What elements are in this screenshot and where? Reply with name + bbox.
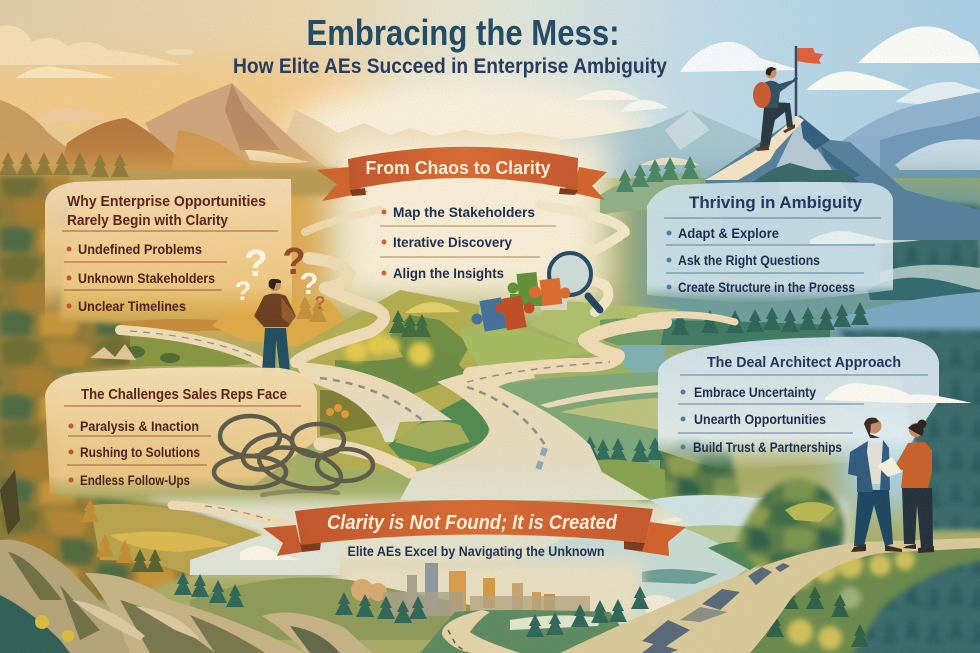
far mountains right <box>560 92 980 220</box>
list: thriving items: Adapt & Explore <box>678 226 779 241</box>
panel: thriving in ambiguity <box>647 182 920 303</box>
left autumn forest <box>0 176 345 600</box>
right evergreen forest <box>600 156 980 530</box>
icon: tangled scribble <box>214 416 373 496</box>
list: why enterprise items: Undefined Problems <box>78 242 202 257</box>
title <box>233 12 667 78</box>
list: challenges items: Endless Follow-Ups <box>80 473 190 488</box>
summit mountain <box>705 115 980 240</box>
road dashes <box>130 331 610 520</box>
winding roads <box>120 205 770 526</box>
clouds in the sky <box>0 25 980 112</box>
list: why enterprise items <box>66 242 215 314</box>
icon: climber with flag on summit <box>753 46 823 151</box>
ribbon: from chaos to clarity: From Chaos to Clarity <box>366 157 551 178</box>
list: deal architect items: Build Trust & Partnerships <box>693 440 842 455</box>
panel: challenges sales reps face <box>45 367 317 495</box>
icon: confused person with question marks <box>235 241 326 372</box>
list: thriving items: Ask the Right Questions <box>678 253 820 268</box>
heading: deal architect: The Deal Architect Approach <box>707 354 901 371</box>
list: deal architect items: Unearth Opportunities <box>694 412 826 427</box>
icon: confused person with question marks: ? <box>244 243 268 285</box>
icon: confused person with question marks: ? <box>314 293 326 313</box>
title: How Elite AEs Succeed in Enterprise Ambiguity <box>233 55 667 78</box>
bottom tree line <box>174 572 649 637</box>
heading: challenges: The Challenges Sales Reps Face <box>81 386 287 403</box>
panel: deal architect approach <box>658 337 972 470</box>
icon: puzzle pieces and magnifier <box>472 253 600 332</box>
subtitle: elite aes: Elite AEs Excel by Navigating the Unknown <box>348 543 604 559</box>
ribbon: clarity is not found: Clarity is Not Found; It is Created <box>327 512 618 534</box>
list: why enterprise items: Unclear Timelines <box>78 299 186 314</box>
icon: confused person with question marks: ? <box>282 241 306 283</box>
icon: confused person with question marks: ? <box>300 266 318 301</box>
list: from chaos to clarity items <box>380 204 556 281</box>
lower valley water and bank <box>190 495 785 653</box>
bottom-left rocky hills <box>0 540 372 653</box>
ribbon: from chaos to clarity <box>317 147 607 201</box>
central valley hills <box>300 290 680 500</box>
list: challenges items <box>68 419 200 488</box>
cloud across panel <box>825 383 972 403</box>
list: challenges items: Paralysis & Inaction <box>80 419 199 434</box>
panel: why enterprise opportunities <box>45 179 292 320</box>
icon: two colleagues with document <box>848 418 934 553</box>
list: thriving items <box>666 226 855 295</box>
heading: why enterprise: Rarely Begin with Clarity <box>67 212 229 229</box>
right mid foliage clump <box>735 478 845 570</box>
far mountains left <box>0 83 560 185</box>
bottom-right green hillside <box>680 545 980 653</box>
list: from chaos to clarity items: Align the Insights <box>393 265 504 281</box>
title: Embracing the Mess: <box>306 12 620 53</box>
list: deal architect items: Embrace Uncertainty <box>694 385 816 400</box>
list: from chaos to clarity items: Iterative Discovery <box>393 234 512 250</box>
cloud across panel <box>810 231 920 244</box>
bottom city skyline <box>190 563 640 653</box>
list: challenges items: Rushing to Solutions <box>80 445 200 460</box>
list: from chaos to clarity items: Map the Stakeholders <box>393 204 535 220</box>
heading: why enterprise <box>67 193 266 229</box>
list: why enterprise items: Unknown Stakeholders <box>78 271 215 286</box>
heading: why enterprise: Why Enterprise Opportunities <box>67 193 266 210</box>
wide road sections <box>296 362 650 500</box>
list: deal architect items <box>680 385 842 455</box>
icon: confused person with question marks: ? <box>235 276 251 306</box>
list: thriving items: Create Structure in the Process <box>678 280 855 295</box>
left tree line at mountain foot <box>0 152 340 196</box>
foreground path with paving stones <box>560 538 980 653</box>
heading: thriving: Thriving in Ambiguity <box>689 193 863 212</box>
ribbon: clarity is not found <box>263 500 686 556</box>
